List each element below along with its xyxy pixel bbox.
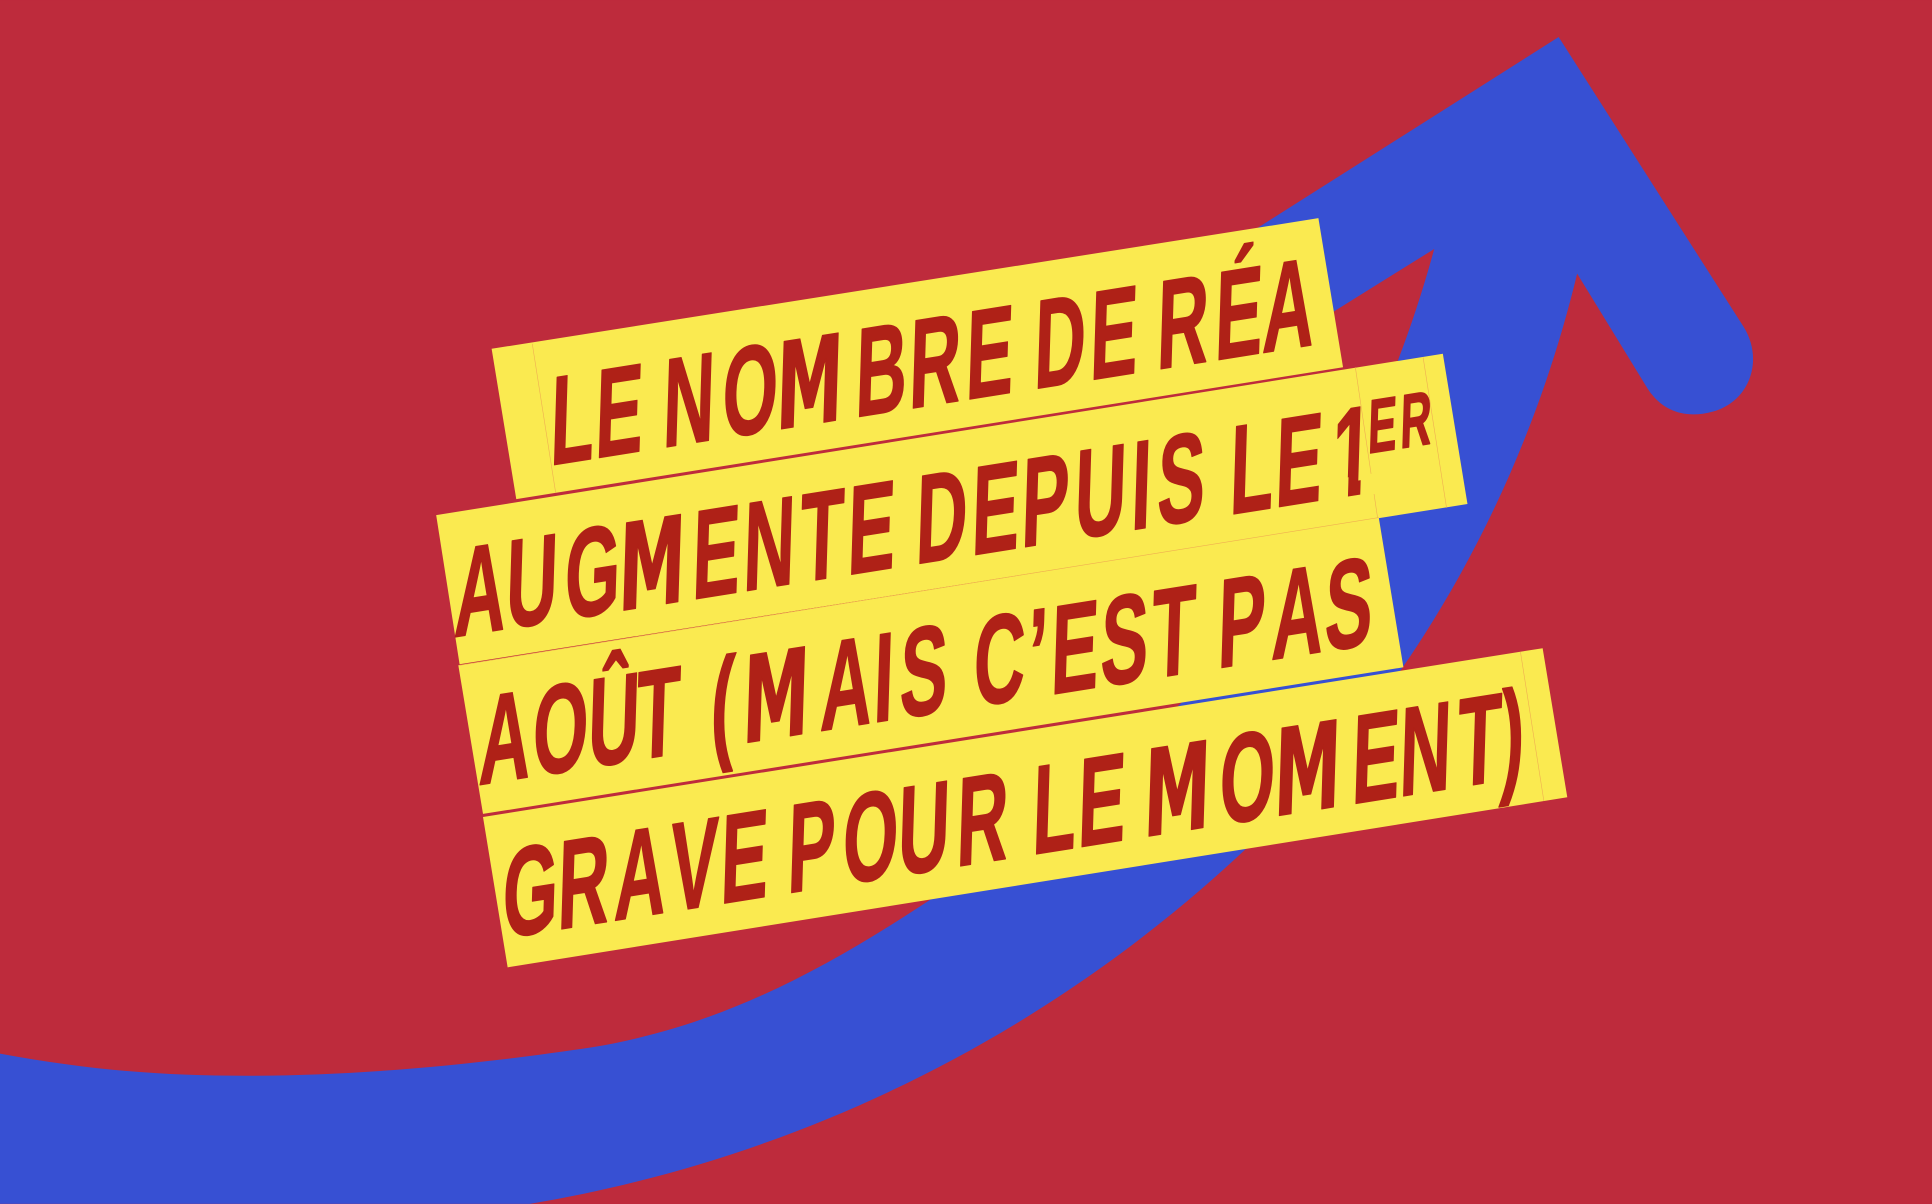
headline line 1: LE NOMBRE DE RÉA: [549, 230, 1316, 494]
yellow strips with headline: [436, 218, 1567, 967]
headline line 2: ER: [1367, 376, 1433, 471]
strip 2 background: [436, 354, 1467, 664]
strip 4 background: [483, 648, 1567, 967]
headline line 3: AOÛT (MAIS C’EST PAS: [477, 528, 1375, 813]
strip 3 background: [458, 518, 1403, 814]
headline line 4: GRAVE POUR LE MOMENT): [501, 663, 1527, 967]
strip 1 background: [492, 218, 1343, 499]
headline line 2: AUGMENTE DEPUIS LE 1: [453, 378, 1374, 665]
